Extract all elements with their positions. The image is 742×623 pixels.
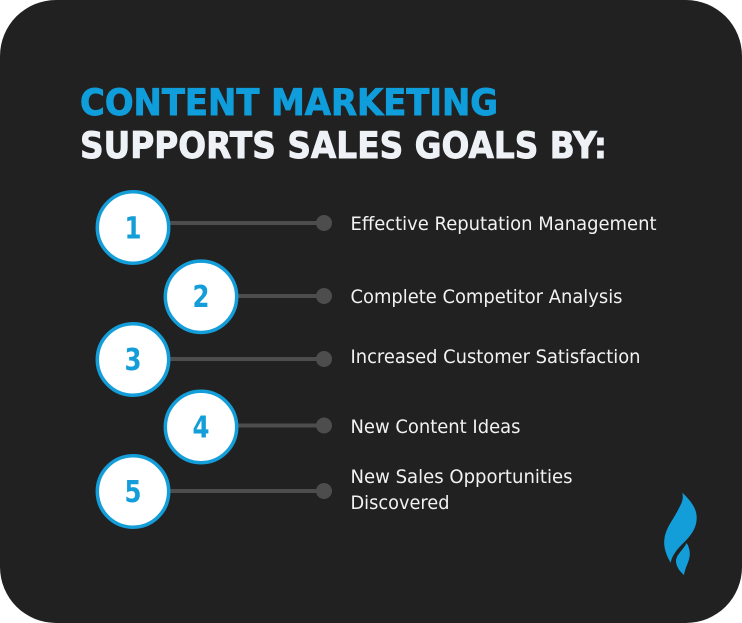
item 4: 4 <box>192 410 210 446</box>
icon: flame logo <box>664 493 697 575</box>
item 5: New Sales Opportunities <box>350 467 572 488</box>
item 1: 1 <box>124 212 142 246</box>
title <box>80 81 607 167</box>
item 4 <box>165 391 521 463</box>
title: SUPPORTS SALES GOALS BY: <box>80 124 607 167</box>
item 2 <box>165 261 623 332</box>
item 2: 2 <box>192 280 210 315</box>
item 5: Discovered <box>350 493 450 514</box>
item 1: Effective Reputation Management <box>350 214 656 235</box>
item 2: Complete Competitor Analysis <box>350 287 622 308</box>
title: CONTENT MARKETING <box>80 81 498 124</box>
item 5 <box>97 456 573 527</box>
item 4: New Content Ideas <box>350 417 520 438</box>
item 1 <box>97 192 657 263</box>
item 3 <box>97 324 641 395</box>
item 3: 3 <box>124 343 142 378</box>
item 5: 5 <box>124 475 142 510</box>
item 3: Increased Customer Satisfaction <box>350 347 640 368</box>
